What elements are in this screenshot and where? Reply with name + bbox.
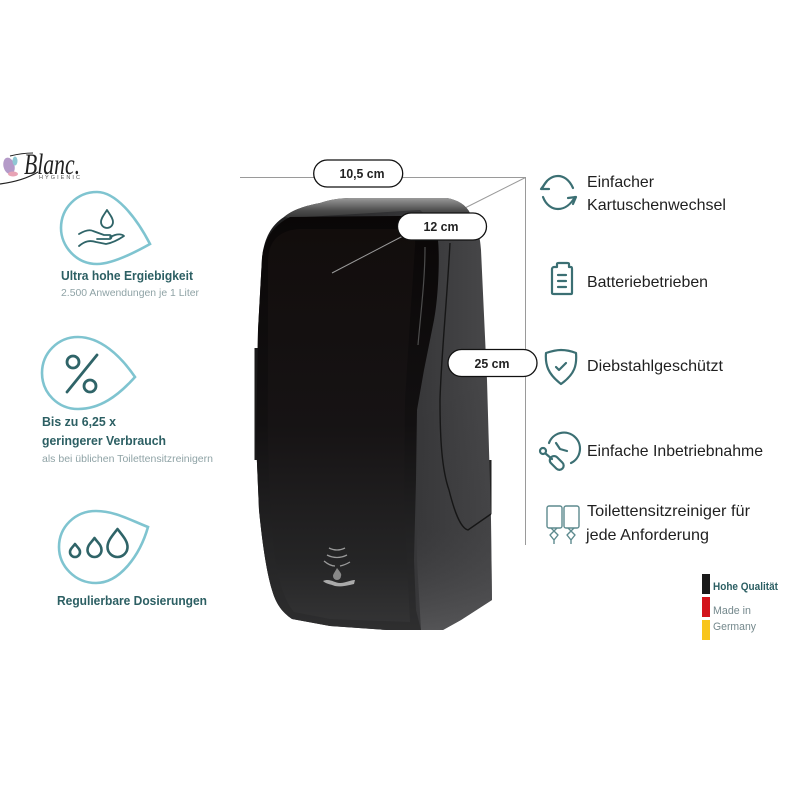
- right feature: cleaner cartridges: [547, 503, 751, 544]
- text: Einfacher: [587, 174, 655, 191]
- dimension label: 12 cm: [398, 213, 486, 240]
- icon: clock with screwdriver: [540, 433, 580, 472]
- icon: two cartridges: [547, 506, 579, 544]
- left feature: consumption: geringerer Verbrauch: [42, 433, 166, 448]
- left feature: consumption: [42, 337, 213, 465]
- heading: Bis zu 6,25 x: [42, 414, 117, 429]
- dimension lines: [240, 178, 526, 545]
- right feature: easy setup: [540, 433, 763, 472]
- icon: battery: [552, 263, 572, 294]
- quality badge: Germany: [713, 621, 756, 633]
- left feature: dosing: [57, 511, 207, 608]
- dispenser seam: [440, 243, 491, 530]
- product: black dispenser: [254, 198, 492, 630]
- heading: Regulierbare Dosierungen: [57, 593, 207, 608]
- left feature: yield: [61, 192, 199, 299]
- logo: Blanc Hygienic: [0, 148, 80, 184]
- dimension label: 10,5 cm: 10,5 cm: [340, 166, 384, 181]
- logo: Blanc Hygienic: Blanc.: [24, 148, 80, 181]
- subtext: als bei üblichen Toilettensitzreinigern: [42, 453, 213, 465]
- right feature: cartridge change: Kartuschenwechsel: [587, 197, 726, 214]
- right feature: theft protection: [546, 350, 724, 384]
- right feature: cleaner cartridges: jede Anforderung: [585, 527, 709, 544]
- text: Einfache Inbetriebnahme: [587, 443, 763, 460]
- heading: Ultra hohe Ergiebigkeit: [61, 268, 194, 283]
- logo: Blanc Hygienic: HYGIENIC: [39, 175, 80, 181]
- dispenser top cap: [284, 198, 476, 226]
- dimension label: 12 cm: 12 cm: [424, 219, 458, 234]
- text: Diebstahlgeschützt: [587, 358, 724, 375]
- text: Batteriebetrieben: [587, 274, 708, 291]
- subtext: 2.500 Anwendungen je 1 Liter: [61, 287, 199, 299]
- dispenser body: [256, 198, 492, 630]
- dispenser side lower sheen: [417, 380, 492, 630]
- icon: hand with drop: [61, 192, 150, 264]
- dimension label: 25 cm: [448, 350, 537, 376]
- icon: refresh arrows: [541, 176, 576, 209]
- dimension line: depth on front: [332, 236, 403, 273]
- label: Made in Germany: Made in: [713, 605, 751, 617]
- icon: percent: [42, 337, 135, 409]
- dimension label: 10,5 cm: [314, 160, 403, 187]
- dispenser left tab: [254, 348, 258, 460]
- flag: German colours: [702, 574, 710, 640]
- dispenser right tab: [488, 460, 492, 514]
- right feature: battery: [552, 263, 708, 294]
- icon: shield: [546, 350, 576, 384]
- quality badge: [702, 574, 778, 640]
- dispenser front highlight: [418, 247, 425, 345]
- icon: three drops: [59, 511, 148, 583]
- dispenser front panel: [256, 216, 439, 630]
- dimension label: 25 cm: 25 cm: [474, 356, 510, 371]
- label: Hohe Qualität: Hohe Qualität: [713, 581, 778, 593]
- text: Toilettensitzreiniger für: [587, 503, 751, 520]
- dispenser glossy centre panel: [268, 229, 415, 622]
- right feature: cartridge change: [541, 174, 726, 214]
- sensor icon: [323, 548, 355, 586]
